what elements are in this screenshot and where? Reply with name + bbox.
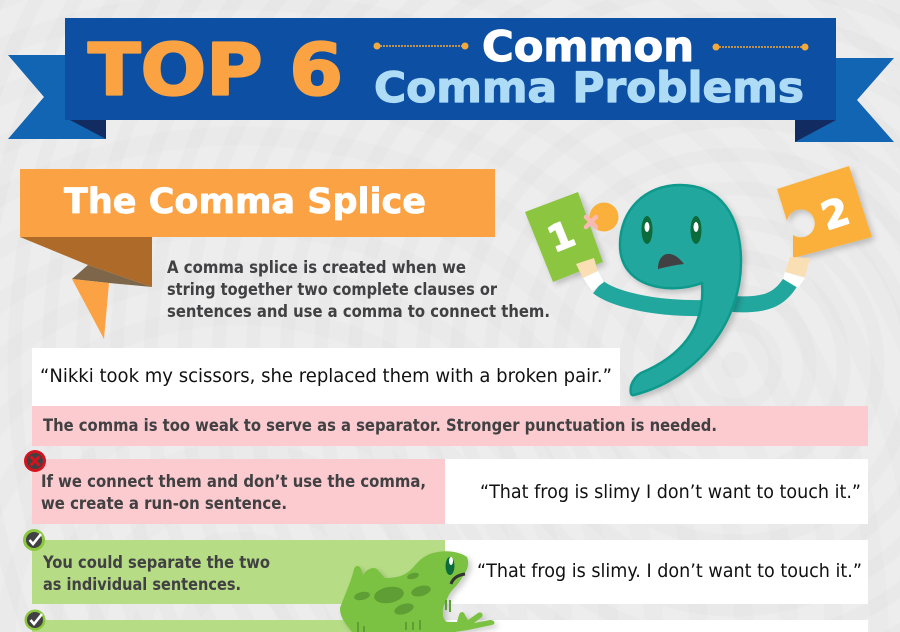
- explanation bar: The comma is too weak to serve as a separator. Stronger punctuation is needed.: [43, 416, 717, 435]
- header fold brown: [20, 237, 152, 287]
- frog illustration: [340, 551, 494, 632]
- row: run-on sentence: If we connect them and don’t use the comma,: [41, 472, 426, 491]
- banner left fold: [70, 120, 106, 139]
- header fold shade: [72, 265, 152, 287]
- frog spots: [353, 572, 432, 617]
- frog mouth: [451, 574, 465, 584]
- right dotted ornament: [712, 44, 808, 50]
- heading: TOP 6: TOP 6: [88, 28, 343, 112]
- icon: check 2: [24, 610, 46, 630]
- row: separate sentences: You could separate the two: [42, 553, 270, 572]
- banner right fold: [795, 120, 836, 142]
- intro text: A comma splice is created when we: [167, 258, 466, 277]
- green puzzle card 1: [525, 192, 603, 282]
- right cuff and hand: [783, 257, 810, 288]
- heading: Common: Common: [482, 22, 694, 71]
- section heading: The Comma Splice: [64, 182, 426, 222]
- row: run-on sentence: [32, 459, 868, 524]
- explanation bar: [32, 406, 868, 446]
- eyes: [642, 216, 702, 244]
- orange puzzle card 2: [777, 166, 872, 258]
- section header: The Comma Splice: [20, 169, 495, 339]
- bandage cross: [586, 217, 596, 227]
- quote: scissors example: [32, 348, 620, 406]
- row: separate sentences: [32, 540, 868, 604]
- heading: Comma Problems: Comma Problems: [374, 63, 804, 112]
- row: run-on sentence: “That frog is slimy I don’t want to touch it.”: [480, 481, 861, 503]
- mouth: [658, 254, 684, 269]
- quote: scissors example: “Nikki took my scissors, she replaced them with a broken pair.”: [40, 365, 612, 387]
- row: run-on sentence: we create a run-on sentence.: [41, 494, 287, 513]
- banner left ribbon tail: [8, 55, 106, 139]
- orange puzzle knob: [590, 202, 618, 232]
- banner right ribbon tail: [795, 58, 894, 142]
- icon: red X: [24, 450, 46, 472]
- frog drips: [358, 600, 450, 632]
- right arm: [733, 281, 791, 304]
- row: separate sentences: “That frog is slimy. I don’t want to touch it.”: [477, 560, 862, 582]
- title banner: [8, 18, 894, 142]
- left dotted ornament: [374, 42, 468, 50]
- row: separate sentences: as individual sentences.: [43, 575, 241, 594]
- comma character: [525, 166, 872, 395]
- header band: [20, 169, 495, 237]
- banner main panel: [65, 18, 836, 120]
- left cuff and hand: [576, 258, 604, 291]
- header fold tip: [72, 279, 109, 339]
- row: next solution: [32, 620, 868, 632]
- frog body: [340, 551, 494, 632]
- icon: check 1: [23, 529, 45, 551]
- orange puzzle card 2: 2: [816, 189, 855, 239]
- comma body: [620, 185, 741, 395]
- frog eye: [446, 557, 454, 575]
- intro text: string together two complete clauses or: [167, 280, 498, 299]
- left arm: [598, 287, 705, 308]
- intro text: [167, 258, 550, 321]
- intro text: sentences and use a comma to connect them.: [167, 302, 550, 321]
- green puzzle card 1: 1: [542, 214, 581, 261]
